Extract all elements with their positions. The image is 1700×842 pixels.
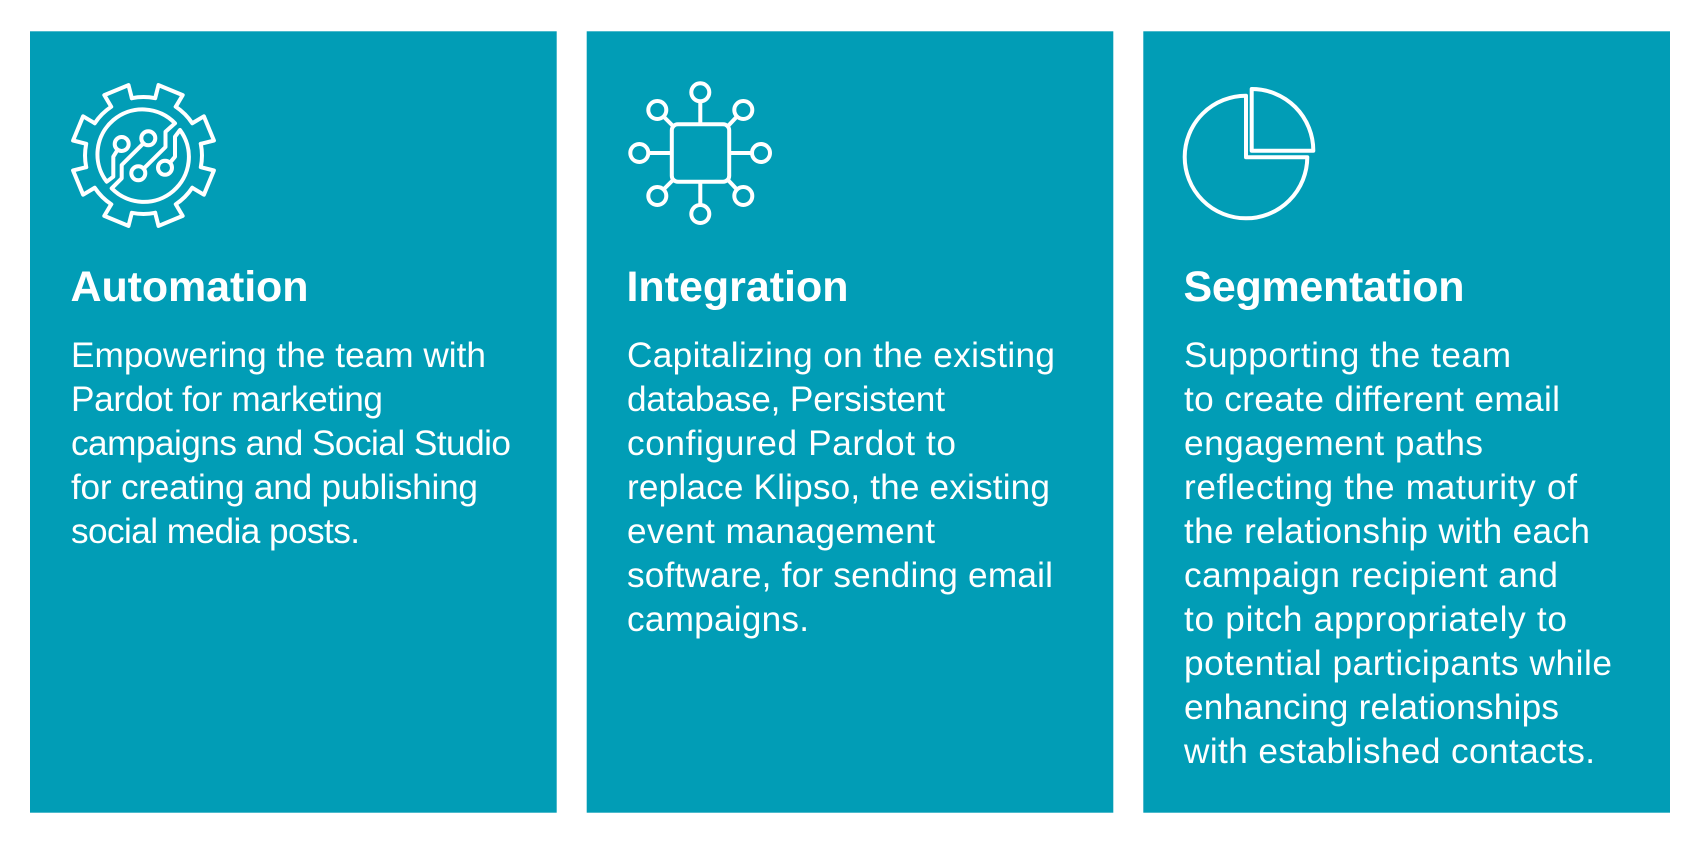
panel: automation <box>30 31 557 813</box>
panel: segmentation <box>1143 31 1670 813</box>
text block: automation description: Pardot for marketing <box>71 380 383 419</box>
text block: segmentation description: to create different email <box>1184 380 1560 419</box>
text block: automation description: for creating and publishing <box>71 468 478 507</box>
text block: integration description: software, for sending email <box>627 556 1053 595</box>
text block: integration description: event management <box>627 512 935 551</box>
text block: segmentation description: Supporting the team <box>1184 336 1511 375</box>
text block: segmentation description: the relationship with each <box>1184 512 1590 551</box>
text block: segmentation description: reflecting the maturity of <box>1184 468 1577 507</box>
text block: integration description: replace Klipso, the existing <box>627 468 1050 507</box>
panel: integration <box>587 31 1113 813</box>
icon: gear with circuit <box>66 78 221 233</box>
text block: segmentation description <box>1183 336 1612 771</box>
text block: segmentation description: potential participants while <box>1184 644 1612 683</box>
text block: segmentation description: enhancing relationships <box>1184 688 1559 727</box>
text block: automation description: social media posts. <box>71 512 360 551</box>
icon: hub with connected nodes <box>630 83 770 223</box>
text block: segmentation description: campaign recipient and <box>1184 556 1558 595</box>
text block: segmentation description: engagement paths <box>1184 424 1483 463</box>
text block: segmentation description: to pitch appropriately to <box>1184 600 1567 639</box>
text block: integration description: Capitalizing on the existing <box>627 336 1055 375</box>
heading: Segmentation: Segmentation <box>1184 263 1464 311</box>
text block: automation description: Empowering the team with <box>71 336 486 375</box>
text block: integration description: configured Pardot to <box>627 424 956 463</box>
heading: Integration: Integration <box>626 263 848 311</box>
text block: segmentation description: with established contacts. <box>1183 732 1595 771</box>
text block: automation description <box>71 336 511 551</box>
text block: integration description <box>627 336 1055 639</box>
heading: Automation: Automation <box>70 263 308 311</box>
icon: pie chart <box>1185 89 1313 218</box>
text block: integration description: database, Persistent <box>627 380 945 419</box>
text block: integration description: campaigns. <box>627 600 809 639</box>
text block: automation description: campaigns and Social Studio <box>71 424 511 463</box>
